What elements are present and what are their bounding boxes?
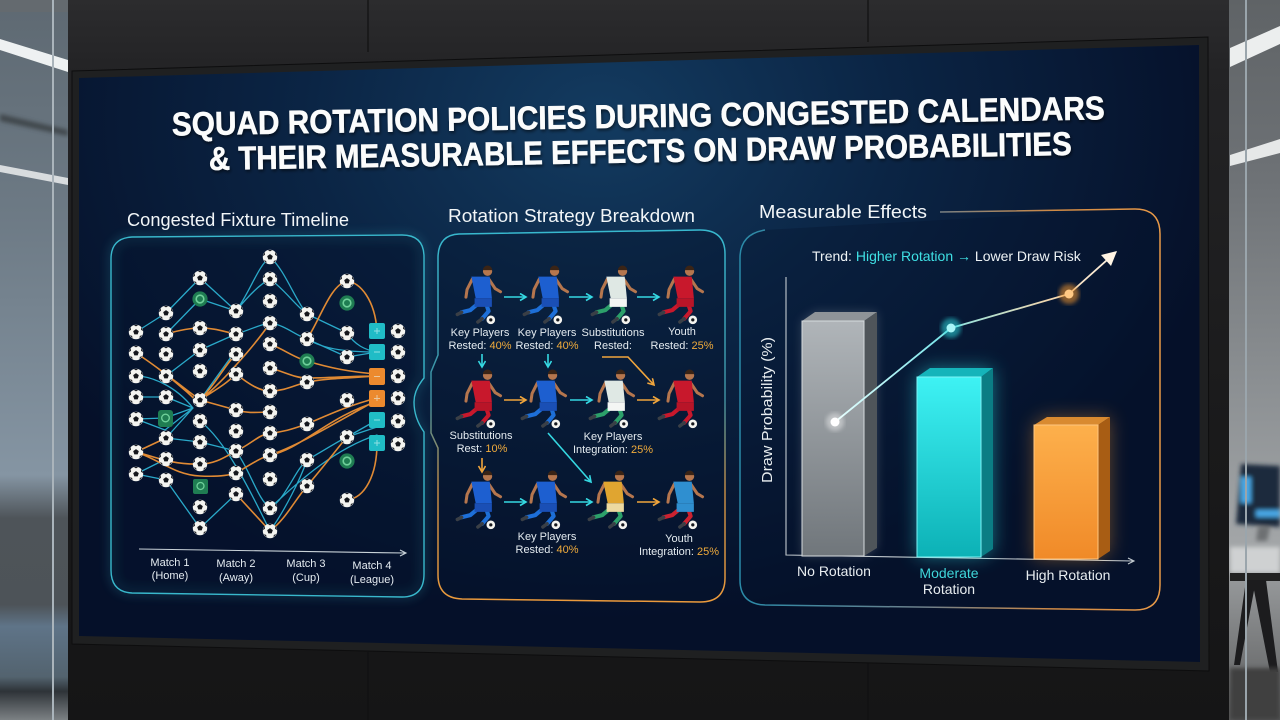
rotation decision squares [369,323,385,451]
fixture node column 6 [299,307,315,493]
heading: congested fixture timeline: Congested Fixture Timeline [127,210,349,230]
title [171,89,1105,177]
fixture node column 7 [339,274,355,507]
chart axes [786,277,1134,564]
timeline match labels [150,557,394,586]
timeline match labels: Match 2 [216,558,256,570]
players: row 1 [457,266,703,324]
timeline match labels: (League) [350,574,394,586]
row 1 labels [448,326,714,352]
row 2 labels [450,430,653,456]
title: & THEIR MEASURABLE EFFECTS ON DRAW PROBABILITIES [208,125,1072,177]
trend line with arrow [826,251,1117,431]
fixture node column 1 [129,325,143,481]
bar labels: No Rotation [797,563,871,579]
row 1 labels: Rested: [594,340,632,352]
players: row 2 [457,370,703,428]
timeline match labels: (Home) [152,570,188,582]
row 2 labels: Key Players [584,431,643,443]
row 1 labels: Rested: 40% [448,340,512,352]
panel: congested fixture timeline [111,210,424,597]
timeline match labels: Match 4 [352,560,392,572]
row 1 labels: Rested: 25% [650,340,714,352]
row 2 labels: Integration: 25% [573,444,653,456]
row 2 labels: Substitutions [450,430,513,442]
arrows: cyan flow [482,297,659,502]
bar: high rotation [1034,417,1110,559]
row 3 labels: Key Players [518,531,577,543]
y axis label: Draw Probability (%) [759,337,776,483]
row 3 labels: Rested: 40% [516,544,579,556]
display screen surface [79,45,1200,662]
row 1 labels: Rested: 40% [516,340,579,352]
row 3 labels: Youth [665,533,693,545]
trend caption: Trend: Higher Rotation → Lower Draw Risk [812,248,1082,264]
timeline match labels: (Away) [219,572,253,584]
row 3 labels [516,531,719,558]
timeline match labels: Match 3 [286,558,326,570]
fixture node column 3 [192,271,208,535]
row 1 labels: Key Players [451,327,510,339]
panel: measurable effects [740,202,1160,610]
fixture node column 4 [229,304,243,501]
row 1 labels: Youth [668,326,696,338]
bar labels [797,563,1110,597]
row 3 labels: Integration: 25% [639,546,719,558]
background: left glass office view [0,0,70,720]
panel frame [111,235,424,597]
row 2 labels: Rest: 10% [457,443,508,455]
display screen bezel [72,37,1209,671]
title: SQUAD ROTATION POLICIES DURING CONGESTED CALENDARS [171,89,1105,142]
bar: no rotation [802,312,877,556]
bar labels: Rotation [923,581,975,597]
panel: rotation strategy breakdown [431,206,725,602]
background: right glass office view [1228,0,1280,720]
fixture node column 8 [391,324,405,451]
fixture node column 5 [263,250,277,538]
network links: orange rotation paths [136,281,377,531]
bar: moderate rotation [917,368,993,557]
bar labels: High Rotation [1026,567,1110,583]
panel frame [431,230,725,602]
panel frame [740,209,1160,610]
heading: measurable effects: Measurable Effects [759,202,927,222]
timeline match labels: (Cup) [292,572,320,584]
bar labels: Moderate [919,565,979,581]
fixture node column 2 [158,306,173,487]
row 1 labels: Key Players [518,327,577,339]
timeline match labels: Match 1 [150,557,190,569]
row 1 labels: Substitutions [582,327,645,339]
heading: rotation strategy breakdown: Rotation Strategy Breakdown [448,206,695,226]
timeline axis arrow [139,549,406,556]
players: row 3 [457,471,703,529]
arrows: orange flow [482,357,659,502]
network links: cyan rotation paths [136,257,377,531]
